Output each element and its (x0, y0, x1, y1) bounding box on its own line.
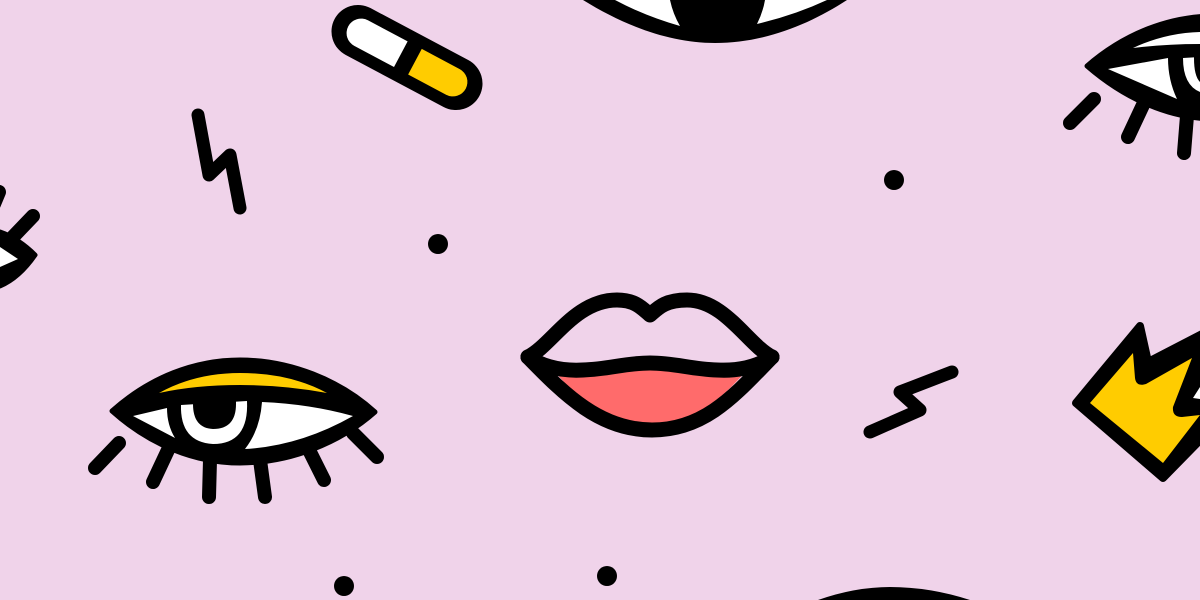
icon: lips (528, 300, 772, 430)
icon: pill (322, 0, 492, 119)
icon: flipped eye at left edge (0, 192, 35, 286)
icon: crown (1076, 326, 1200, 478)
icon: eye with yellow lid (95, 360, 377, 497)
dots (334, 170, 904, 596)
icon: eye at top right (1070, 16, 1200, 153)
icon: eye cropped at top (583, 0, 847, 43)
icon: lightning bolt left (198, 115, 240, 208)
icon: lightning bolt right (870, 372, 952, 432)
icon: eye cropped at bottom (818, 587, 970, 600)
